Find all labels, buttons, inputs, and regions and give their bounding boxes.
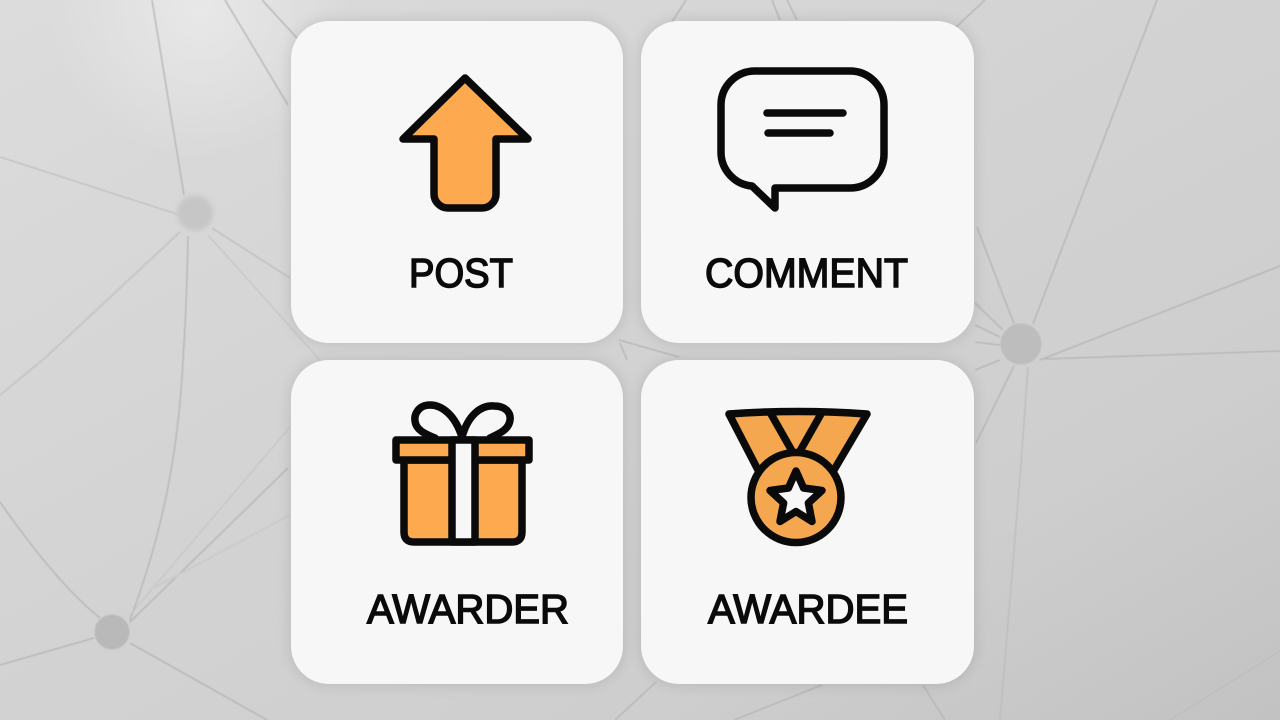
icon: medal [729,412,867,542]
panel: awarder [291,360,623,684]
icon: speech bubble [721,71,884,208]
label: post: POST [409,250,513,296]
panel: post [291,21,623,343]
icon: up arrow [403,78,528,208]
label: awardee: AWARDEE [708,586,908,632]
label: comment: COMMENT [705,250,908,296]
panel: comment [641,21,974,343]
label: awarder: AWARDER [367,586,569,632]
panel: awardee [641,360,974,684]
icon: gift box [396,405,529,542]
